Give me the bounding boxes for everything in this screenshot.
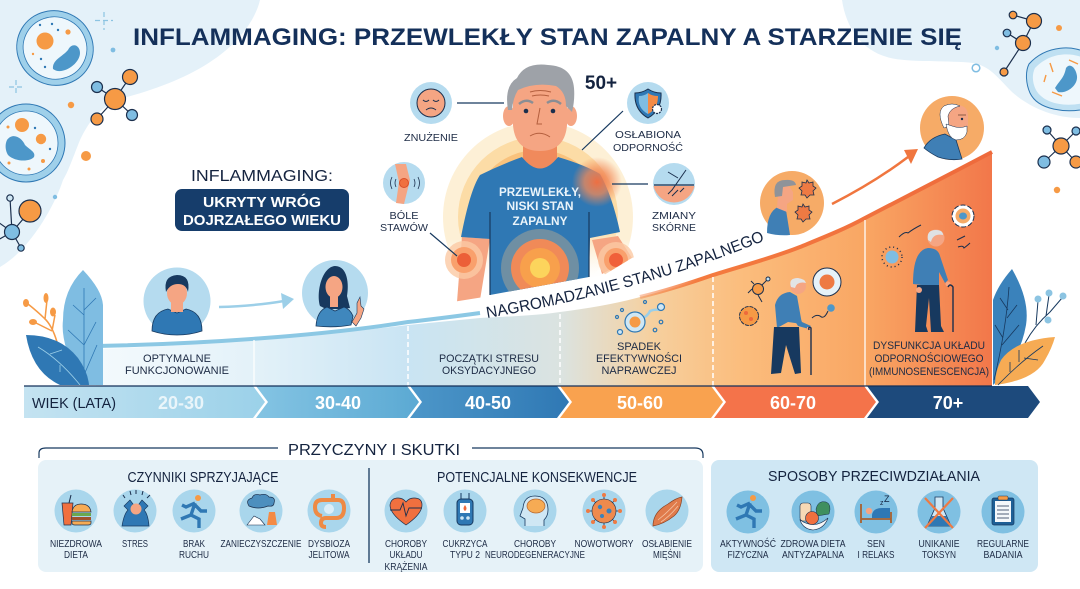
symptom: fatigue: ZNUŻENIE bbox=[404, 131, 458, 144]
icon: molecule lower left bbox=[0, 195, 41, 251]
item: muscle weakness: OSŁABIENIE bbox=[642, 539, 692, 550]
item: avoiding toxins bbox=[918, 490, 960, 561]
item: sleep and relaxation: I RELAKS bbox=[858, 550, 895, 561]
white ribbon bbox=[440, 190, 880, 318]
item: sleep and relaxation bbox=[854, 490, 898, 561]
decorative dots right bbox=[972, 25, 1062, 193]
icon: young woman bbox=[302, 260, 368, 327]
shirt text bbox=[499, 185, 581, 228]
item: gut dysbiosis: DYSBIOZA bbox=[308, 539, 350, 550]
decorative dots left bbox=[9, 12, 115, 199]
item: lack of exercise: RUCHU bbox=[179, 550, 209, 561]
icon: molecule right bbox=[1038, 126, 1080, 168]
shirt text: PRZEWLEKŁY, bbox=[499, 185, 581, 199]
item: physical activity: AKTYWNOŚĆ bbox=[720, 537, 776, 550]
title: INFLAMMAGING: PRZEWLEKŁY STAN ZAPALNY A STARZENIE SIĘ bbox=[133, 24, 962, 51]
age timeline: 30-40 bbox=[315, 393, 361, 413]
central figure: older man with inflammation bbox=[443, 65, 634, 312]
subtitle block bbox=[175, 168, 349, 231]
label: 50+: 50+ bbox=[585, 73, 617, 94]
item: avoiding toxins: UNIKANIE bbox=[918, 539, 960, 550]
item: lack of exercise bbox=[172, 490, 216, 561]
symptom: weakened immunity: ODPORNOŚĆ bbox=[613, 141, 683, 154]
arm hot spots bbox=[445, 241, 634, 279]
stage label: 40-50: POCZĄTKI STRESU bbox=[439, 353, 539, 365]
shirt text: NISKI STAN bbox=[506, 199, 574, 213]
divider bbox=[368, 468, 370, 563]
item: type 2 diabetes: TYPU 2 bbox=[450, 550, 480, 561]
right foliage bbox=[993, 269, 1066, 385]
icon: middle-aged man with pathogens bbox=[760, 171, 824, 235]
icon: molecule top left bbox=[91, 70, 138, 125]
item: sleep and relaxation: Z bbox=[884, 494, 890, 504]
panel: countermeasures bbox=[711, 460, 1038, 572]
stage label: 20-30: OPTYMALNE bbox=[143, 353, 211, 365]
item: cancers: NOWOTWORY bbox=[574, 539, 634, 550]
heading: causes and effects bbox=[39, 442, 703, 459]
stage label: 40-50 bbox=[439, 353, 539, 377]
item: gut dysbiosis bbox=[308, 490, 350, 561]
icon: cell top right bbox=[1026, 48, 1080, 111]
age timeline bbox=[24, 386, 1040, 418]
item: cardiovascular disease: KRĄŻENIA bbox=[384, 560, 428, 573]
item: muscle weakness: MIĘŚNI bbox=[653, 548, 681, 561]
shirt text: ZAPALNY bbox=[512, 214, 568, 228]
icon: elderly man with beard bbox=[920, 96, 984, 160]
symptom: fatigue bbox=[404, 82, 458, 144]
head bbox=[503, 65, 577, 151]
icon: 70+ pathogens bbox=[882, 205, 974, 267]
item: cardiovascular disease: CHOROBY bbox=[385, 539, 427, 550]
age timeline: 20-30 bbox=[158, 393, 204, 413]
stage label: 40-50: OKSYDACYJNEGO bbox=[442, 365, 536, 377]
arrow: rising bbox=[832, 149, 918, 204]
panel: causes and consequences bbox=[38, 460, 703, 572]
icon: standing elderly man bbox=[913, 230, 953, 332]
curve label: NAGROMADZANIE STANU ZAPALNEGO bbox=[486, 232, 763, 318]
leader lines bbox=[430, 103, 648, 256]
age timeline: 70+ bbox=[933, 393, 963, 413]
item: lack of exercise: BRAK bbox=[183, 539, 205, 550]
icon: cell mid left bbox=[0, 104, 65, 182]
item: unhealthy diet: DIETA bbox=[64, 550, 88, 561]
item: anti-inflammatory diet bbox=[780, 490, 846, 561]
icon: small cell stage 50-60 bbox=[616, 300, 664, 334]
symptom: skin changes: SKÓRNE bbox=[652, 221, 696, 234]
age timeline: WIEK (LATA) bbox=[32, 396, 116, 412]
item: pollution: ZANIECZYSZCZENIE bbox=[220, 539, 302, 550]
icon: bent elderly man bbox=[771, 278, 811, 375]
curve top stroke: orange bbox=[640, 152, 992, 297]
item: physical activity: FIZYCZNA bbox=[728, 550, 769, 561]
icon: young man bbox=[144, 268, 210, 335]
icon: 60-70 pathogens bbox=[740, 268, 841, 326]
item: unhealthy diet: NIEZDROWA bbox=[50, 539, 102, 550]
symptom: weakened immunity bbox=[613, 82, 683, 154]
neck bbox=[523, 140, 557, 174]
stage label: 70+ bbox=[869, 340, 989, 378]
item: regular check-ups: REGULARNE bbox=[977, 539, 1029, 550]
rising area chart bbox=[96, 152, 992, 386]
item: cardiovascular disease bbox=[384, 490, 428, 573]
stage label: 50-60: NAPRAWCZEJ bbox=[602, 365, 676, 377]
item: neurodegenerative disease: CHOROBY bbox=[514, 539, 556, 550]
item: cancers bbox=[574, 490, 634, 550]
item: anti-inflammatory diet: ZDROWA DIETA bbox=[780, 539, 846, 550]
item: pollution bbox=[220, 490, 302, 550]
age timeline: 50-60 bbox=[617, 393, 663, 413]
item: cardiovascular disease: UKŁADU bbox=[390, 550, 422, 561]
stage label: 20-30: FUNKCJONOWANIE bbox=[125, 365, 229, 377]
symptom: joint pain: STAWÓW bbox=[380, 221, 429, 234]
stage label: 70+: (IMMUNOSENESCENCJA) bbox=[869, 366, 989, 378]
item: neurodegenerative disease: NEURODEGENERACYJNE bbox=[485, 550, 585, 561]
belly hot spot bbox=[501, 229, 579, 292]
stage label: 50-60: EFEKTYWNOŚCI bbox=[596, 352, 682, 365]
left foliage bbox=[23, 270, 103, 385]
item: avoiding toxins: TOKSYN bbox=[922, 550, 956, 561]
icon: cell top left bbox=[4, 0, 106, 98]
curve top stroke: blue bbox=[97, 313, 480, 346]
subtitle block: UKRYTY WRÓG bbox=[203, 193, 321, 211]
shoulder hot spot bbox=[572, 157, 622, 207]
background blob: top left bbox=[0, 0, 260, 267]
heading: potential consequences: POTENCJALNE KONSEKWENCJE bbox=[437, 469, 637, 486]
item: stress bbox=[114, 490, 156, 550]
item: type 2 diabetes bbox=[442, 490, 488, 561]
stage label: 50-60 bbox=[596, 341, 682, 377]
symptom: skin changes bbox=[652, 163, 696, 234]
item: type 2 diabetes: CUKRZYCA bbox=[442, 539, 488, 550]
item: muscle weakness bbox=[642, 490, 692, 561]
symptom: weakened immunity: OSŁABIONA bbox=[615, 130, 681, 141]
stage label: 20-30 bbox=[125, 353, 229, 377]
background blob: top right bbox=[842, 0, 1080, 118]
heading: countermeasures: SPOSOBY PRZECIWDZIAŁANIA bbox=[768, 468, 980, 485]
subtitle block: DOJRZAŁEGO WIEKU bbox=[183, 212, 341, 229]
symptom: joint pain: BÓLE bbox=[390, 209, 419, 222]
symptom: joint pain bbox=[380, 162, 429, 234]
subtitle block: INFLAMMAGING: bbox=[191, 168, 333, 185]
heading: contributing factors: CZYNNIKI SPRZYJAJĄCE bbox=[128, 469, 278, 486]
age timeline: 40-50 bbox=[465, 393, 511, 413]
stage label: 70+: ODPORNOŚCIOWEGO bbox=[874, 352, 984, 365]
item: anti-inflammatory diet: ANTYZAPALNA bbox=[782, 550, 844, 561]
item: stress: STRES bbox=[122, 539, 148, 550]
symptom: skin changes: ZMIANY bbox=[652, 211, 696, 222]
item: regular check-ups: BADANIA bbox=[984, 550, 1023, 561]
t-shirt bbox=[461, 157, 620, 295]
item: neurodegenerative disease bbox=[485, 490, 585, 561]
stage label: 50-60: SPADEK bbox=[617, 341, 662, 353]
item: unhealthy diet bbox=[50, 490, 102, 561]
item: sleep and relaxation: SEN bbox=[867, 539, 885, 550]
heading: causes and effects: PRZYCZYNY I SKUTKI bbox=[288, 442, 460, 459]
item: regular check-ups bbox=[977, 490, 1029, 561]
stage label: 70+: DYSFUNKCJA UKŁADU bbox=[873, 340, 985, 352]
icon: molecule top right bbox=[1000, 11, 1042, 76]
arrow: youth to adult bbox=[219, 293, 294, 309]
item: physical activity bbox=[720, 490, 776, 561]
item: sleep and relaxation: z bbox=[880, 500, 884, 507]
item: gut dysbiosis: JELITOWA bbox=[308, 550, 350, 561]
age timeline: 60-70 bbox=[770, 393, 816, 413]
